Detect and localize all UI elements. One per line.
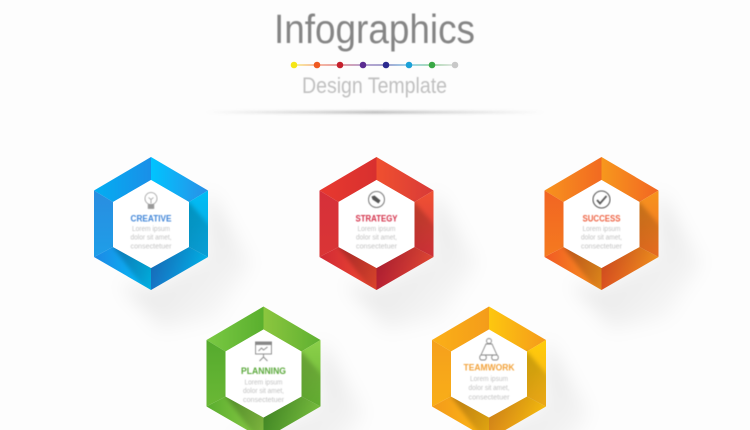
label: strategy: STRATEGY — [356, 214, 398, 224]
description text: dolor sit amet, — [130, 234, 172, 242]
colored dot timeline — [291, 62, 458, 68]
hexagon: planning — [206, 306, 364, 430]
description text: dolor sit amet, — [581, 234, 622, 242]
description text — [243, 380, 285, 404]
description text — [581, 226, 623, 250]
icon: group of people — [480, 338, 498, 360]
icon: presentation board — [256, 342, 272, 361]
description text: Lorem ipsum — [358, 226, 396, 233]
icon: tag in circle — [368, 192, 384, 208]
description text: consectetuer — [243, 397, 285, 404]
subtitle: Design Template — [302, 73, 447, 98]
description text: Lorem ipsum — [244, 380, 283, 386]
description text — [130, 226, 172, 250]
label: success: SUCCESS — [582, 214, 620, 224]
hexagon: teamwork — [432, 306, 589, 430]
label: teamwork: TEAMWORK — [464, 362, 515, 372]
description text: dolor sit amet, — [243, 388, 284, 395]
label: creative: CREATIVE — [130, 214, 172, 224]
description text: consectetuer — [130, 244, 172, 250]
hexagon: creative — [94, 157, 240, 322]
description text — [468, 376, 510, 402]
description text: Lorem ipsum — [582, 226, 621, 233]
description text: dolor sit amet, — [356, 234, 397, 242]
label: planning: PLANNING — [241, 366, 286, 376]
description text: consectetuer — [356, 244, 398, 250]
hexagon: strategy — [320, 157, 465, 322]
description text: Lorem ipsum — [470, 376, 508, 383]
icon: light bulb — [145, 192, 157, 208]
description text: consectetuer — [581, 244, 623, 250]
description text: Lorem ipsum — [132, 226, 170, 233]
title: Infographics — [274, 6, 475, 52]
description text: dolor sit amet, — [468, 385, 510, 392]
description text: consectetuer — [468, 394, 510, 402]
hexagon: success — [544, 157, 690, 322]
description text — [356, 226, 398, 250]
header divider shadow — [205, 111, 545, 114]
icon: check mark in circle — [593, 191, 610, 208]
